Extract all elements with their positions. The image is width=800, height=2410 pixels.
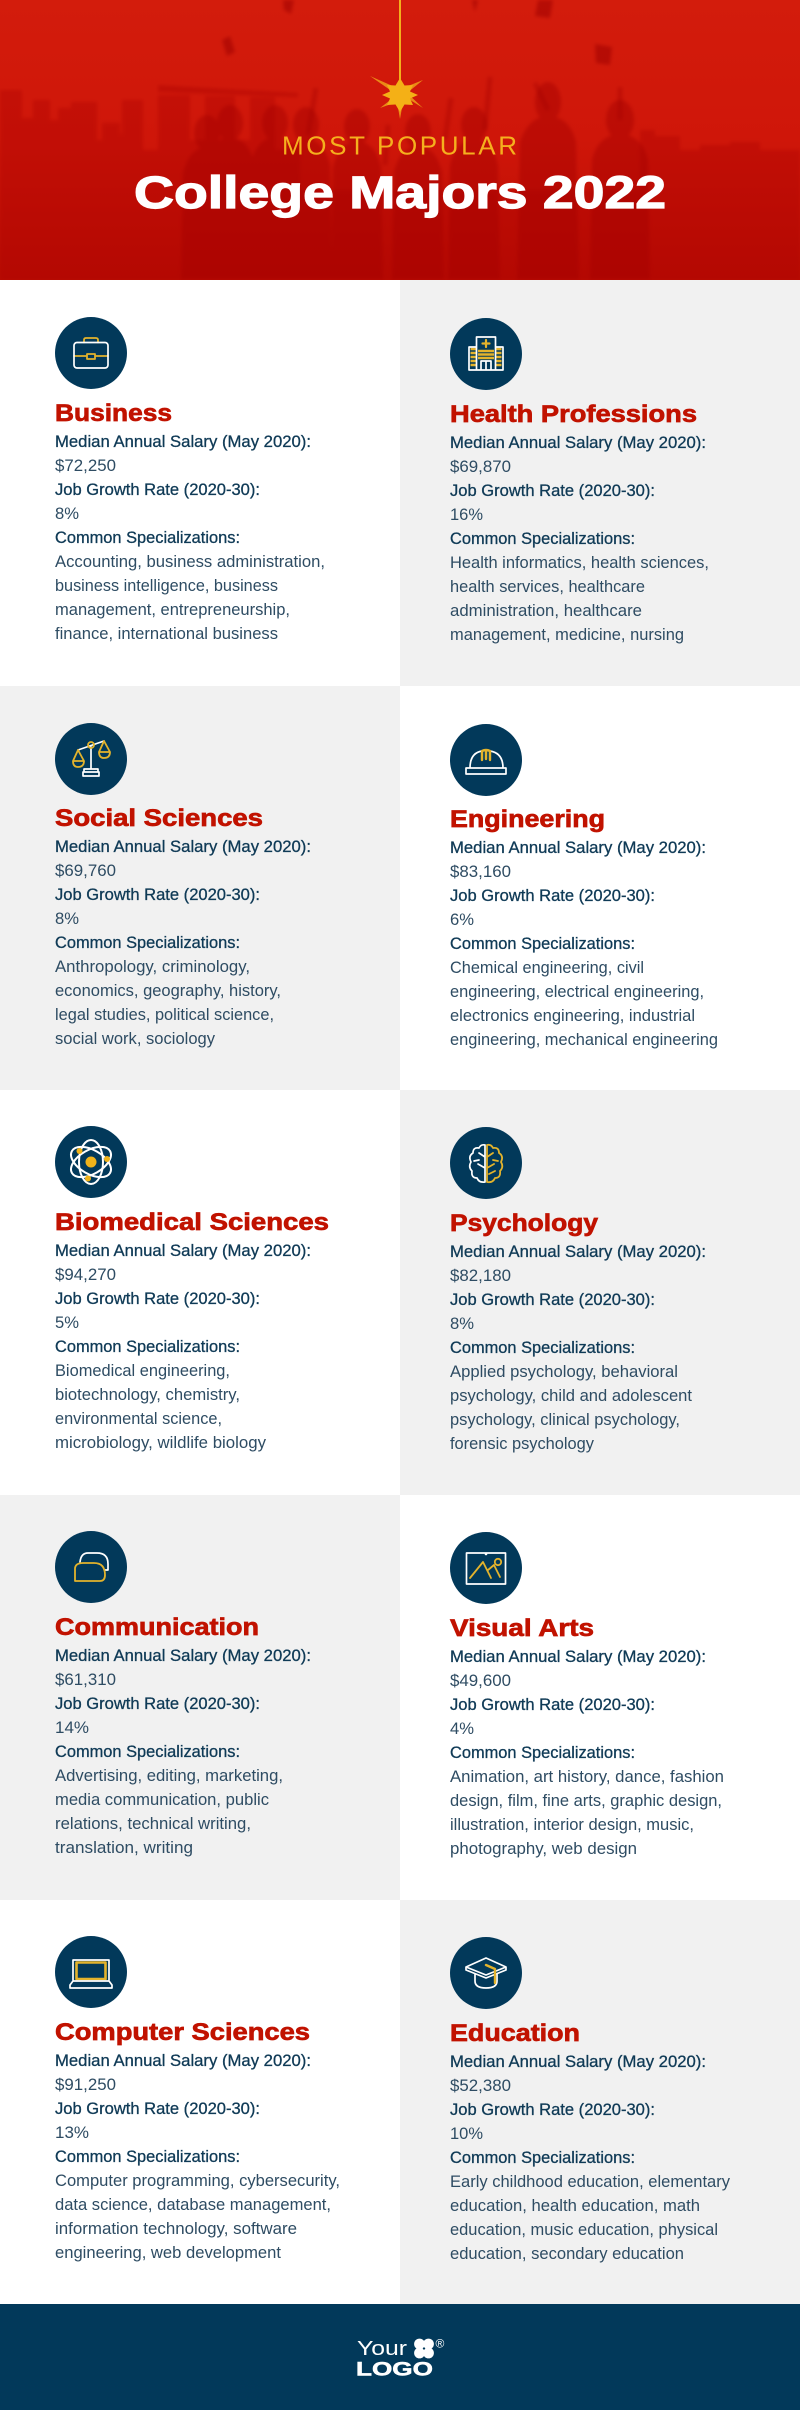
text: Health Professions details: 16% <box>450 506 483 524</box>
text: Visual Arts details: Common Specializations: <box>450 1744 635 1762</box>
icon: brain <box>450 1127 522 1199</box>
text: Health Professions details: administration, healthcare <box>450 602 642 620</box>
text: Psychology details <box>450 1210 706 1453</box>
text: Psychology details: Psychology <box>450 1210 599 1237</box>
text: Business details: Job Growth Rate (2020-30): <box>55 481 260 499</box>
panel: Computer Sciences <box>0 1900 400 2304</box>
text: Business details: Common Specializations: <box>55 529 240 547</box>
text: Engineering details: Median Annual Salary (May 2020): <box>450 839 706 857</box>
text: Psychology details: Job Growth Rate (2020-30): <box>450 1291 655 1309</box>
text: Health Professions details <box>450 401 709 644</box>
text: Health Professions details: Job Growth Rate (2020-30): <box>450 482 655 500</box>
text: Communication details: $61,310 <box>55 1671 116 1689</box>
logo placeholder: LOGO <box>356 2360 433 2380</box>
footer band <box>0 2304 800 2410</box>
text: Visual Arts details: Job Growth Rate (2020-30): <box>450 1696 655 1714</box>
panel: Engineering <box>400 686 800 1090</box>
text: Education details: $52,380 <box>450 2077 511 2095</box>
text: Communication details <box>55 1614 311 1857</box>
icon: laptop <box>55 1936 127 2008</box>
panel: Business <box>0 280 400 686</box>
text: Health Professions details: management, medicine, nursing <box>450 626 684 644</box>
text: Education details: Education <box>450 2020 580 2047</box>
text: Health Professions details: Health informatics, health sciences, <box>450 554 709 572</box>
text: Business details: 8% <box>55 505 79 523</box>
text: Computer Sciences details: Computer programming, cybersecurity, <box>55 2172 340 2190</box>
text: Health Professions details: Health Professions <box>450 401 697 428</box>
panel: Communication <box>0 1495 400 1900</box>
text: Engineering details: $83,160 <box>450 863 511 881</box>
main title: College Majors 2022 <box>134 167 666 218</box>
text: Engineering details: engineering, electrical engineering, <box>450 983 704 1001</box>
icon: hard hat <box>450 724 522 796</box>
text: Engineering details: Engineering <box>450 806 605 833</box>
text: Health Professions details: Common Specializations: <box>450 530 635 548</box>
text: Engineering details: Common Specializations: <box>450 935 635 953</box>
hanging line and star <box>370 0 423 119</box>
text: Computer Sciences details: data science, database management, <box>55 2196 331 2214</box>
text: Biomedical Sciences details: Job Growth Rate (2020-30): <box>55 1290 260 1308</box>
text: Computer Sciences details: Job Growth Rate (2020-30): <box>55 2100 260 2118</box>
icon: hospital <box>450 318 522 390</box>
text: Computer Sciences details: Common Specializations: <box>55 2148 240 2166</box>
text: Biomedical Sciences details: environmental science, <box>55 1410 222 1428</box>
icon: scales <box>55 723 127 795</box>
text: Social Sciences details: Common Specializations: <box>55 934 240 952</box>
text: Engineering details <box>450 806 718 1049</box>
subtitle: MOST POPULAR <box>282 130 517 160</box>
text: Biomedical Sciences details: Median Annual Salary (May 2020): <box>55 1242 311 1260</box>
text: Communication details: Common Specializations: <box>55 1743 240 1761</box>
text: Engineering details: engineering, mechanical engineering <box>450 1031 718 1049</box>
text: Business details: $72,250 <box>55 457 116 475</box>
text: Education details: Common Specializations: <box>450 2149 635 2167</box>
text: Psychology details: Median Annual Salary (May 2020): <box>450 1243 706 1261</box>
text: Social Sciences details: 8% <box>55 910 79 928</box>
text: Social Sciences details: Job Growth Rate (2020-30): <box>55 886 260 904</box>
photo silhouette: skyline and graduates <box>0 0 800 280</box>
icon: atom <box>55 1126 127 1198</box>
text: Business details: Accounting, business administration, <box>55 553 325 571</box>
text: Psychology details: psychology, clinical psychology, <box>450 1411 680 1429</box>
text: Psychology details: Common Specializations: <box>450 1339 635 1357</box>
text: Education details: 10% <box>450 2125 483 2143</box>
text: Social Sciences details: $69,760 <box>55 862 116 880</box>
text: Business details <box>55 400 325 643</box>
text: Communication details: media communication, public <box>55 1791 269 1809</box>
text: Communication details: translation, writing <box>55 1839 193 1857</box>
panel: Health Professions <box>400 280 800 686</box>
text: Biomedical Sciences details: Biomedical Sciences <box>55 1209 329 1236</box>
text: Communication details: Median Annual Salary (May 2020): <box>55 1647 311 1665</box>
text: Psychology details: 8% <box>450 1315 474 1333</box>
text: Visual Arts details: 4% <box>450 1720 474 1738</box>
text: Communication details: Communication <box>55 1614 259 1641</box>
text: Computer Sciences details: 13% <box>55 2124 89 2142</box>
logo placeholder: Your <box>357 2338 407 2360</box>
text: Business details: Business <box>55 400 172 427</box>
panel: Biomedical Sciences <box>0 1090 400 1495</box>
text: Health Professions details: $69,870 <box>450 458 511 476</box>
text: Visual Arts details: design, film, fine arts, graphic design, <box>450 1792 722 1810</box>
text: Biomedical Sciences details: biotechnology, chemistry, <box>55 1386 240 1404</box>
text: Social Sciences details: social work, sociology <box>55 1030 216 1048</box>
text: Communication details: Advertising, editing, marketing, <box>55 1767 283 1785</box>
text: Psychology details: psychology, child and adolescent <box>450 1387 692 1405</box>
text: Social Sciences details: Anthropology, criminology, <box>55 958 250 976</box>
text: Engineering details: 6% <box>450 911 474 929</box>
text: Visual Arts details: $49,600 <box>450 1672 511 1690</box>
icon: speech bubbles <box>55 1531 127 1603</box>
text: Biomedical Sciences details: microbiology, wildlife biology <box>55 1434 267 1452</box>
text: Health Professions details: health services, healthcare <box>450 578 645 596</box>
text: Education details <box>450 2020 731 2263</box>
text: Social Sciences details: Social Sciences <box>55 805 263 832</box>
text: Engineering details: electronics engineering, industrial <box>450 1007 695 1025</box>
text: Education details: education, health education, math <box>450 2197 700 2215</box>
text: Social Sciences details <box>55 805 311 1048</box>
text: Visual Arts details: Visual Arts <box>450 1615 594 1642</box>
icon: briefcase <box>55 317 127 389</box>
text: Computer Sciences details: Computer Sciences <box>55 2019 310 2046</box>
text: Social Sciences details: Median Annual Salary (May 2020): <box>55 838 311 856</box>
text: Computer Sciences details: information technology, software <box>55 2220 297 2238</box>
text: Communication details: Job Growth Rate (2020-30): <box>55 1695 260 1713</box>
panel: Social Sciences <box>0 686 400 1090</box>
text: Communication details: relations, technical writing, <box>55 1815 251 1833</box>
logo placeholder: ® <box>436 2336 444 2350</box>
text: Visual Arts details: Animation, art history, dance, fashion <box>450 1768 724 1786</box>
text: Business details: finance, international business <box>55 625 278 643</box>
text: Engineering details: Job Growth Rate (2020-30): <box>450 887 655 905</box>
text: Visual Arts details <box>450 1615 724 1858</box>
text: Computer Sciences details: engineering, web development <box>55 2244 281 2262</box>
header banner <box>0 0 800 280</box>
text: Education details: Job Growth Rate (2020-30): <box>450 2101 655 2119</box>
text: Computer Sciences details: $91,250 <box>55 2076 116 2094</box>
text: Biomedical Sciences details: $94,270 <box>55 1266 116 1284</box>
text: Social Sciences details: economics, geography, history, <box>55 982 281 1000</box>
text: Education details: education, music education, physical <box>450 2221 718 2239</box>
text: Psychology details: $82,180 <box>450 1267 511 1285</box>
text: Biomedical Sciences details: Common Specializations: <box>55 1338 240 1356</box>
text: Biomedical Sciences details: Biomedical engineering, <box>55 1362 230 1380</box>
text: Communication details: 14% <box>55 1719 89 1737</box>
icon: framed picture <box>450 1532 522 1604</box>
text: Computer Sciences details <box>55 2019 340 2262</box>
panel: Education <box>400 1900 800 2304</box>
text: Visual Arts details: photography, web design <box>450 1840 637 1858</box>
icon: graduation cap <box>450 1937 522 2009</box>
panel: Visual Arts <box>400 1495 800 1900</box>
text: Education details: Median Annual Salary (May 2020): <box>450 2053 706 2071</box>
text: Psychology details: Applied psychology, behavioral <box>450 1363 678 1381</box>
text: Business details: Median Annual Salary (May 2020): <box>55 433 311 451</box>
text: Education details: education, secondary education <box>450 2245 684 2263</box>
text: Business details: management, entrepreneurship, <box>55 601 290 619</box>
logo placeholder <box>356 2336 444 2380</box>
panel: Psychology <box>400 1090 800 1495</box>
text: Psychology details: forensic psychology <box>450 1435 595 1453</box>
text: Biomedical Sciences details: 5% <box>55 1314 79 1332</box>
text: Biomedical Sciences details <box>55 1209 329 1452</box>
text: Computer Sciences details: Median Annual Salary (May 2020): <box>55 2052 311 2070</box>
text: Social Sciences details: legal studies, political science, <box>55 1006 274 1024</box>
text: Visual Arts details: illustration, interior design, music, <box>450 1816 694 1834</box>
text: Education details: Early childhood education, elementary <box>450 2173 731 2191</box>
text: Engineering details: Chemical engineering, civil <box>450 959 644 977</box>
text: Visual Arts details: Median Annual Salary (May 2020): <box>450 1648 706 1666</box>
text: Health Professions details: Median Annual Salary (May 2020): <box>450 434 706 452</box>
text: Business details: business intelligence, business <box>55 577 278 595</box>
